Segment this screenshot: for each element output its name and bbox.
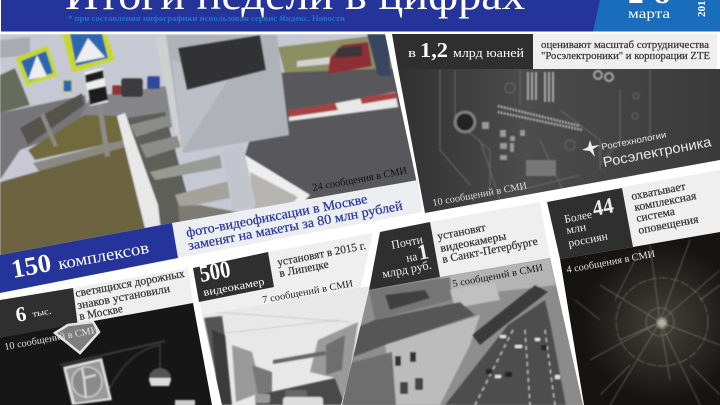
date: марта	[628, 7, 671, 22]
description	[630, 181, 700, 237]
stat: over 44 million: 44	[590, 192, 616, 221]
crosswalk	[289, 92, 398, 121]
source count: 5 сообщений в СМИ	[452, 262, 544, 290]
red car	[328, 42, 372, 74]
description: в Липецке	[278, 259, 330, 280]
description: установят	[436, 222, 487, 243]
stat: 500 cameras: видеокамер	[202, 276, 266, 299]
description: в Москве	[78, 303, 124, 323]
source count: 24: 24 сообщения в СМИ	[312, 166, 408, 194]
description: система	[635, 206, 676, 225]
caption text: фото-видеофиксации в Москве	[185, 191, 368, 240]
road signs	[40, 113, 58, 147]
description	[74, 268, 186, 323]
logo: Roselektronika wordmark: Росэлектроника	[602, 133, 713, 170]
description: "Росэлектроники" и корпорации ZTE	[541, 51, 710, 62]
distant cars	[121, 78, 143, 97]
stat: 150: 150	[9, 248, 53, 284]
panel: road camera photo	[0, 34, 420, 262]
description: установят в 2015 г.	[276, 240, 367, 269]
date	[628, 0, 708, 22]
panel: notification system	[547, 170, 720, 405]
stat: almost 1 billion rubles: Почти	[390, 232, 425, 252]
description: комплексная	[633, 190, 698, 214]
stat: almost 1 billion rubles: 1	[415, 238, 431, 265]
logo: Rostec star	[582, 140, 600, 157]
stat: 500 cameras: 500	[197, 257, 233, 288]
stat: 500 cameras	[197, 257, 266, 299]
white barrier and road	[244, 154, 311, 202]
stat: 1,2 billion yuan: 1,2	[420, 38, 448, 62]
subtitle note: * при составлении инфографики использован сервис Яндекс. Новости	[68, 14, 345, 23]
description: оповещения	[637, 213, 700, 237]
stat: 1,2 billion yuan: в	[408, 45, 416, 60]
street photo	[202, 286, 370, 405]
stat: 1,2 billion yuan: млрд юаней	[453, 45, 524, 60]
caption strip: 150 комплексов	[0, 180, 422, 293]
stat: over 44 million	[563, 192, 616, 250]
logo: Roselektronika wordmark: Ростехнологии	[600, 130, 667, 152]
stat: 1,2 billion yuan	[408, 38, 524, 62]
panel: Lipetsk cameras	[193, 233, 380, 405]
guard rail	[126, 112, 187, 225]
stat: 6 thousand	[14, 301, 52, 327]
description: видеокамеры	[439, 230, 508, 255]
source count: 10: 10 сообщений в СМИ	[432, 181, 528, 209]
source count: 10 сообщений в СМИ	[4, 325, 99, 353]
stat: 150	[9, 230, 151, 284]
stat: almost 1 billion rubles: на	[405, 249, 419, 265]
description: охватывает	[630, 181, 687, 203]
description: светящихся дорожных	[74, 268, 186, 300]
stat: over 44 million: россиян	[567, 231, 609, 250]
stat: 6 thousand: тыс.	[32, 306, 52, 319]
stat: 150: комплексов	[56, 238, 150, 273]
panel: Saint Petersburg cameras	[340, 202, 590, 405]
panel: illuminated signs	[0, 268, 215, 405]
stat: almost 1 billion rubles	[381, 232, 433, 281]
Nevsky photo	[340, 255, 590, 405]
night city map	[555, 225, 720, 405]
source count: 4 сообщения в СМИ	[566, 249, 656, 276]
source count: 7 сообщений в СМИ	[262, 278, 354, 306]
description: знаков установили	[76, 283, 171, 312]
caption text: заменят на макеты за 80 млн рублей	[187, 198, 404, 253]
header band	[0, 0, 720, 32]
stat: over 44 million: млн	[565, 221, 587, 237]
description	[436, 222, 539, 266]
stat: 6 thousand: 6	[14, 301, 28, 327]
stat: almost 1 billion rubles: млрд руб.	[381, 258, 433, 281]
circuit board photo	[395, 69, 720, 214]
description: в Санкт-Петербурге	[441, 236, 539, 266]
diamond road sign	[55, 322, 99, 353]
panel: Rosselektronika	[392, 34, 720, 214]
stat: over 44 million: Более	[563, 209, 593, 226]
camera housing	[156, 36, 182, 148]
description	[541, 40, 710, 62]
night street photo	[0, 300, 215, 405]
description: оценивают масштаб сотрудничества	[541, 40, 709, 51]
